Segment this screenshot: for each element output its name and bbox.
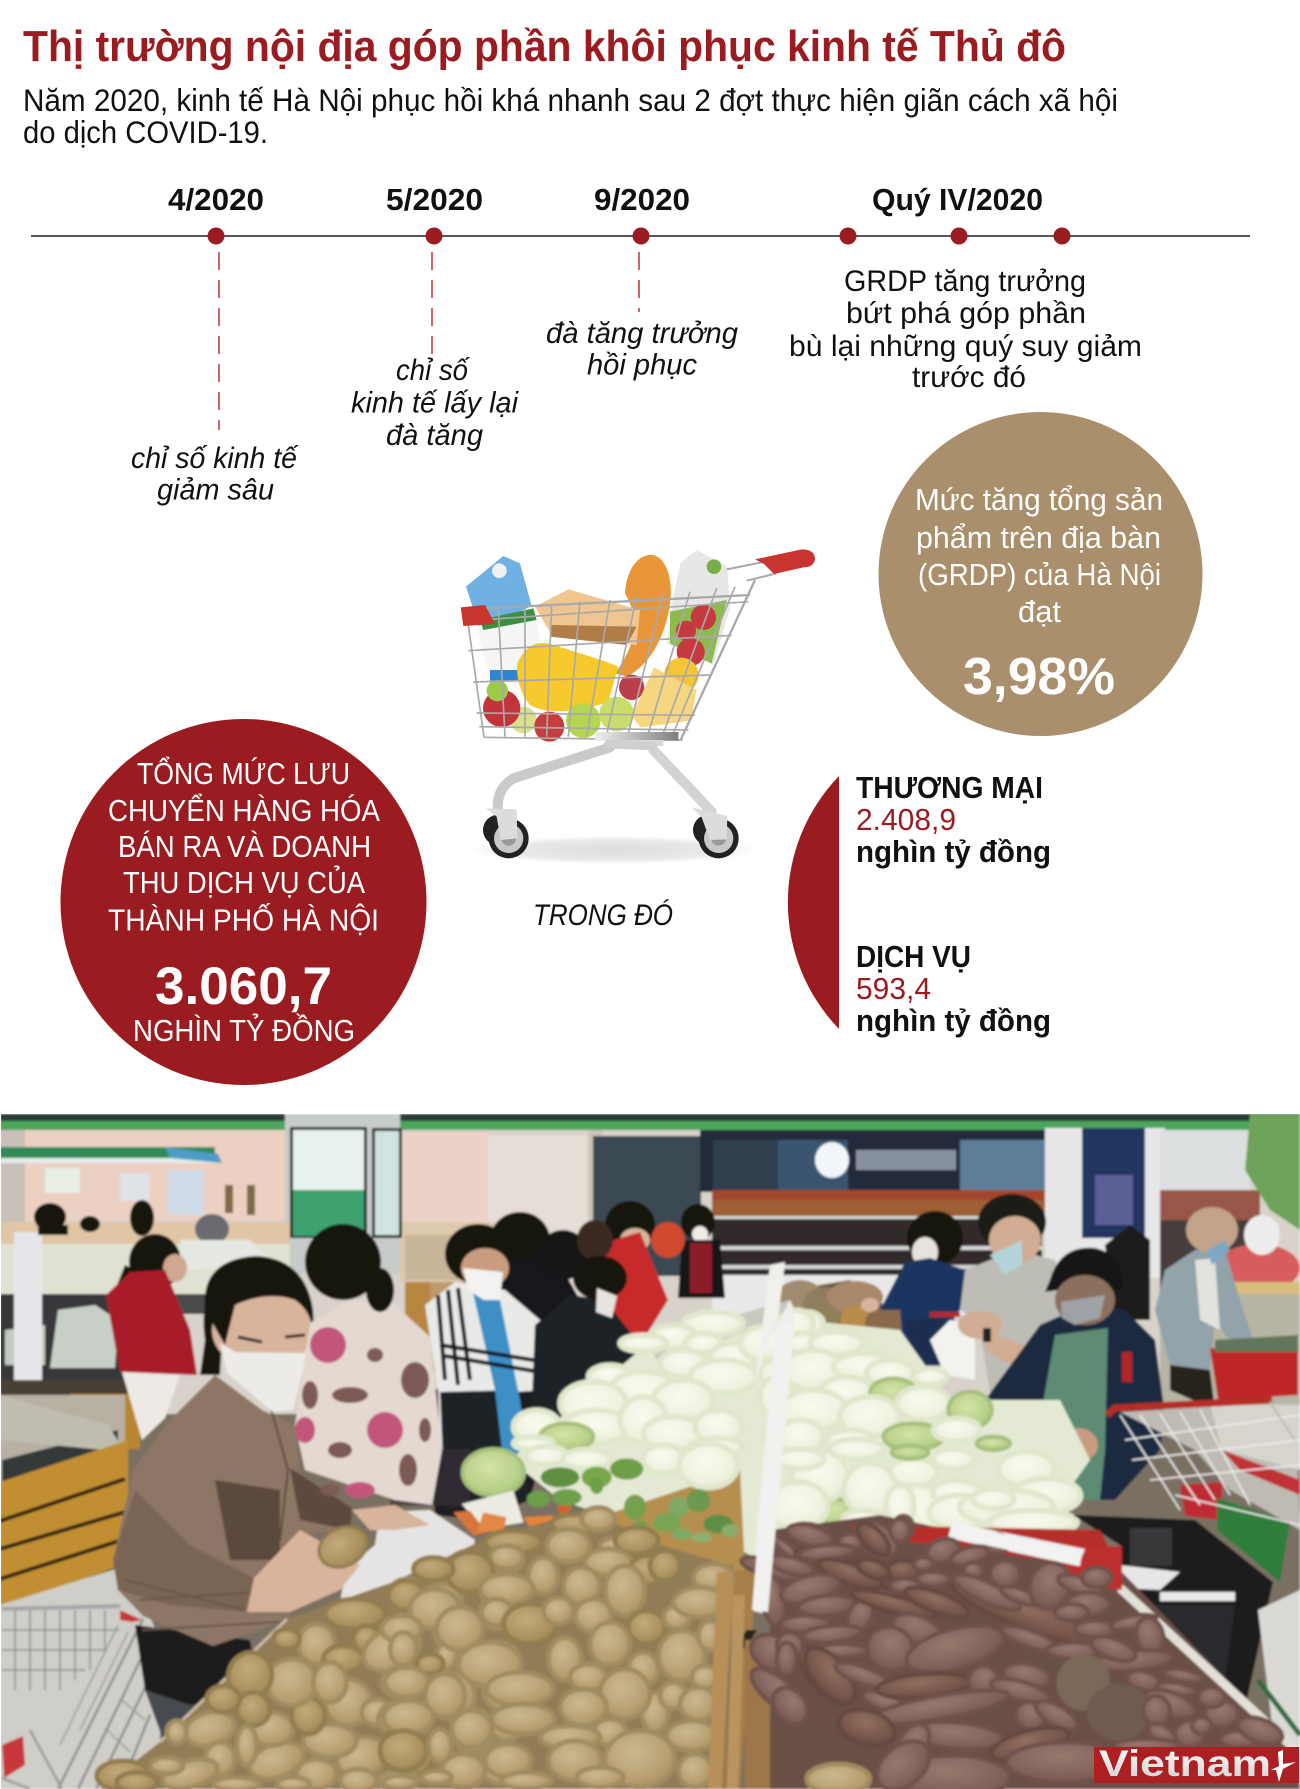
note: September: hồi phục — [587, 348, 697, 382]
cabbages middle — [513, 1312, 913, 1455]
wood divider front — [708, 1572, 733, 1789]
potato pile base — [100, 1509, 733, 1789]
timeline dates: 5/2020 — [386, 183, 483, 217]
bakery counter — [0, 1222, 290, 1244]
background heads — [34, 1200, 154, 1236]
person: young man in grey tee — [930, 1194, 1070, 1392]
potatoes left section — [97, 1546, 527, 1789]
services figure: 593,4 — [856, 972, 931, 1006]
shoppers behind — [491, 1200, 726, 1335]
GRDP value: 3,98% — [963, 648, 1115, 706]
person: dark staff in back — [1105, 1225, 1150, 1320]
person: older man in grey cardigan — [1155, 1207, 1280, 1410]
wooden produce shelf — [614, 1470, 746, 1571]
black crate — [1073, 1515, 1273, 1699]
note: Q4: trước đó — [912, 361, 1026, 394]
pumpkins — [779, 1278, 904, 1333]
trade figure — [856, 771, 1051, 869]
intro text — [23, 82, 1118, 150]
person: back woman — [538, 1230, 588, 1280]
note: Q4: bù lại những quý suy giảm — [789, 330, 1142, 363]
total value: 3.060,7 — [155, 957, 332, 1016]
woman head — [200, 1256, 315, 1375]
panel: total retail circle: THÀNH PHỐ HÀ NỘI — [108, 902, 379, 938]
timeline dates — [168, 183, 1043, 217]
person: woman in red jacket — [106, 1234, 197, 1440]
timeline — [31, 183, 1250, 506]
person: striped jacket man — [423, 1222, 542, 1456]
potatoes right section — [380, 1507, 733, 1789]
note: May: chỉ số — [396, 354, 470, 387]
floor and rim — [1258, 1590, 1300, 1789]
panel: total retail circle: THU DỊCH VỤ CỦA — [123, 864, 365, 900]
bin rim — [160, 1619, 287, 1742]
sweet potatoes left section — [739, 1513, 929, 1789]
left crate — [0, 1395, 128, 1612]
panel: GRDP circle: (GRDP) của Hà Nội — [918, 557, 1161, 592]
note: April: giảm sâu — [157, 474, 274, 506]
services figure — [856, 940, 1051, 1038]
panel: GRDP circle — [878, 412, 1202, 736]
wooden bin sweet potato — [744, 1638, 771, 1789]
note: Q4 — [789, 265, 1142, 394]
back walls — [126, 1412, 1300, 1789]
person: woman in brown jacket foreground — [113, 1256, 475, 1705]
note: Q4: GRDP tăng trưởng — [844, 265, 1086, 298]
timeline dates: Quý IV/2020 — [872, 183, 1043, 217]
title: Thị trường nội địa góp phần khôi phục kinh tế Thủ đô — [23, 22, 1066, 71]
panel: GRDP circle: đạt — [1018, 594, 1061, 629]
person: black jacket woman bending — [531, 1254, 636, 1418]
plastic wrap roll — [948, 1522, 1085, 1566]
note: May: kinh tế lấy lại — [351, 386, 519, 420]
intro text: do dịch COVID-19. — [23, 114, 268, 150]
logo: Vietnam+: Vietnam — [1099, 1743, 1271, 1784]
right trolley and green sign — [1107, 1400, 1300, 1582]
person: floral shirt woman — [295, 1224, 442, 1505]
shelf wood divider — [730, 1570, 735, 1641]
plastic bag — [340, 1510, 475, 1605]
services figure: nghìn tỷ đồng — [856, 1004, 1051, 1038]
icon: shopping cart — [461, 549, 815, 864]
photo: supermarket produce section — [0, 1114, 1300, 1789]
panel: GRDP circle: phẩm trên địa bàn — [916, 520, 1161, 555]
note: April — [131, 442, 299, 506]
person: woman in black cap — [985, 1248, 1165, 1500]
crate and produce sign back — [654, 1300, 790, 1360]
baguette counter sign details — [0, 1147, 215, 1158]
woman hand and potato — [247, 1530, 360, 1612]
sweet potato bin — [770, 1515, 1300, 1789]
timeline markers — [208, 228, 1070, 244]
red shopping basket — [1210, 1348, 1298, 1400]
left floor and cart — [0, 1565, 160, 1789]
dashed connectors — [219, 252, 639, 430]
white sign strip front — [752, 1320, 795, 1612]
person: black shirt man — [491, 1210, 579, 1322]
logo: Vietnam+ — [1094, 1743, 1299, 1784]
digital screens — [290, 1127, 367, 1238]
plastic wrap roll front — [982, 1530, 1083, 1568]
floor gap beside the potato bin — [145, 1630, 280, 1745]
panel: GRDP circle: Mức tăng tổng sản — [915, 482, 1163, 517]
note: May — [351, 354, 519, 452]
trade figure: THƯƠNG MẠI — [856, 771, 1043, 805]
dark area behind shoppers — [433, 1388, 536, 1518]
intro text: Năm 2020, kinh tế Hà Nội phục hồi khá nhanh sau 2 đợt thực hiện giãn cách xã hội — [23, 82, 1118, 118]
panel: breakdown — [788, 771, 1051, 1038]
white sign dividers — [755, 1262, 785, 1385]
caption: in which: TRONG ĐÓ — [533, 899, 673, 932]
panel: total retail circle: TỔNG MỨC LƯU — [137, 755, 350, 791]
note: September: đà tăng trưởng — [546, 317, 738, 350]
panel: total retail circle — [60, 719, 426, 1085]
lower cabbages — [888, 1444, 1085, 1532]
timeline dates: 4/2020 — [168, 183, 264, 217]
panel: total retail circle: CHUYỂN HÀNG HÓA — [108, 793, 380, 828]
wood shelf with bread — [405, 1235, 460, 1280]
breakdown circle segment — [788, 776, 839, 1029]
note: Q4: bứt phá góp phần — [846, 297, 1086, 330]
person: dark cardigan woman — [651, 1204, 725, 1298]
person: red shirt staff — [577, 1201, 668, 1345]
note: May: đà tăng — [386, 419, 483, 452]
trade figure: 2.408,9 — [856, 803, 956, 837]
trade figure: nghìn tỷ đồng — [856, 835, 1051, 869]
face mask — [220, 1343, 307, 1412]
sweet potatoes right section — [766, 1518, 1286, 1789]
green vegetables and carrots — [390, 1444, 738, 1542]
note: April: chỉ số kinh tế — [131, 442, 299, 475]
total unit: NGHÌN TỶ ĐỒNG — [133, 1012, 355, 1048]
cabbage mound base — [740, 1300, 1092, 1558]
person: blue dress woman — [861, 1211, 970, 1370]
timeline dates: 9/2020 — [594, 183, 690, 217]
services figure: DỊCH VỤ — [856, 940, 971, 974]
note: September — [546, 317, 738, 382]
panel: total retail circle: BÁN RA VÀ DOANH — [118, 829, 371, 864]
